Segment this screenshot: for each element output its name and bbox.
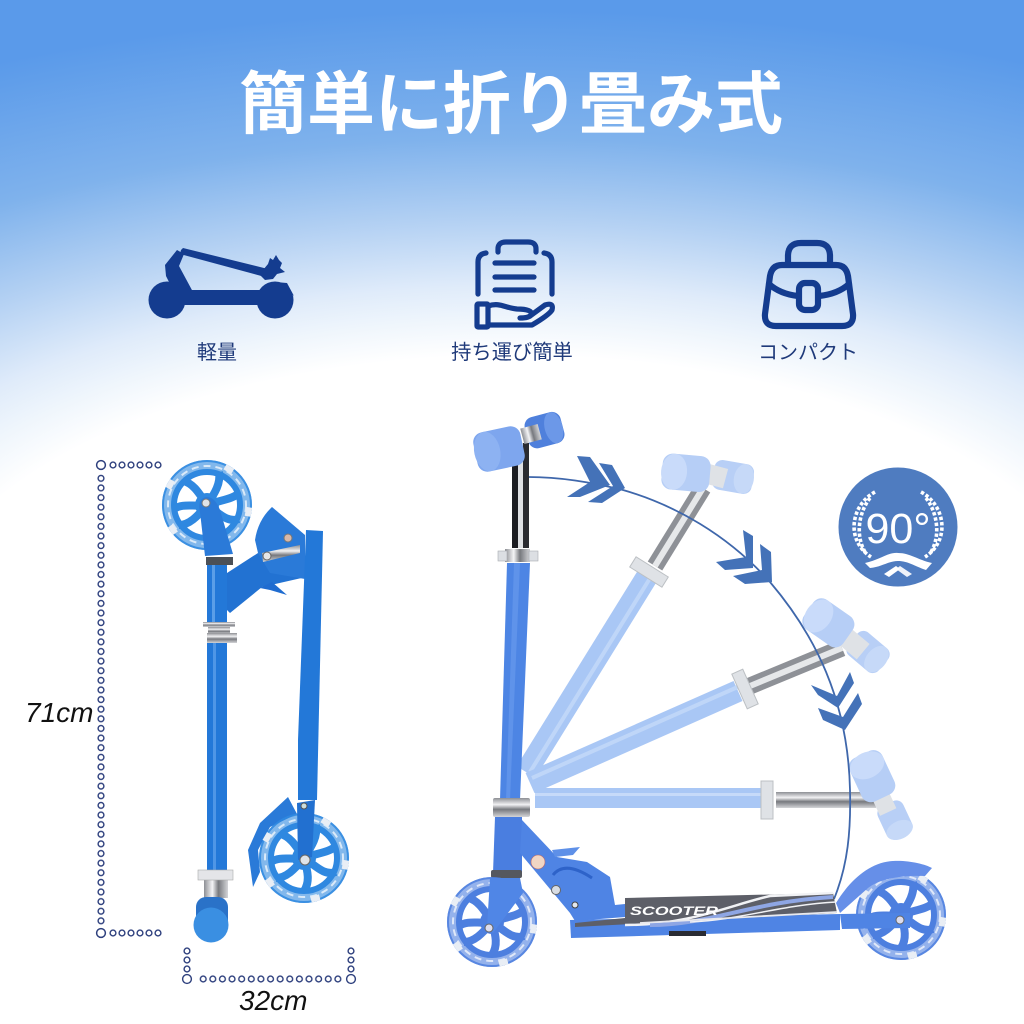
- folded handle grip and clamp: [194, 870, 233, 942]
- front wheel and fork: [447, 877, 537, 967]
- ghost handlebar positions: [526, 453, 916, 844]
- icon: folded scooter: [148, 248, 294, 318]
- head tube and clamp: [491, 798, 530, 878]
- rear wheel and fender: [836, 861, 946, 960]
- deck side bar: [298, 530, 323, 800]
- rotation arc: [528, 477, 850, 899]
- dimension: height 71cm: [25, 461, 162, 937]
- deck text: SCOOTER: SCOOTER: [630, 904, 718, 918]
- ribbon: [865, 553, 932, 577]
- stem tube: [203, 557, 237, 872]
- feature: compact: [758, 243, 858, 364]
- label: compact: コンパクト: [758, 341, 858, 364]
- label: easy to carry: 持ち運び簡単: [451, 341, 573, 364]
- top handlebar grips: [470, 410, 567, 474]
- hinge and deck strut: [520, 820, 625, 921]
- icon: clipboard on hand: [477, 242, 552, 327]
- chevron arrow 1: [567, 456, 625, 503]
- title: 簡単に折り畳み式: [239, 67, 783, 143]
- position at horizontal: [535, 746, 916, 844]
- label: 71cm: 71cm: [25, 697, 93, 728]
- dimension: width 32cm: [183, 948, 355, 1016]
- front fork: [199, 497, 233, 556]
- background gradient: [0, 0, 1024, 520]
- main stem tube: [498, 443, 538, 800]
- top wheel: [162, 460, 252, 550]
- icon: handbag: [765, 243, 853, 326]
- position at 60 degrees: [526, 453, 756, 772]
- deck: [570, 893, 840, 938]
- folded scooter photo: [162, 460, 349, 942]
- label: 32cm: 32cm: [239, 985, 307, 1016]
- arrow chevrons: [567, 456, 862, 730]
- text: 90°: 90°: [865, 505, 931, 553]
- feature: lightweight: [148, 248, 294, 364]
- folding brace and hinge plate: [227, 507, 306, 613]
- position at 30 degrees: [530, 594, 894, 783]
- dotted height bracket: [97, 461, 162, 937]
- chevron arrow 2: [716, 530, 772, 584]
- laurel wreath: [854, 492, 942, 557]
- label: lightweight: 軽量: [197, 341, 237, 364]
- feature: easy to carry: [451, 242, 573, 364]
- badge: 90 degrees: [838, 468, 958, 586]
- upright scooter: [447, 410, 946, 967]
- chevron arrow 3: [811, 672, 862, 730]
- rear wheel and fender: [248, 797, 349, 903]
- dotted width bracket: [183, 948, 355, 983]
